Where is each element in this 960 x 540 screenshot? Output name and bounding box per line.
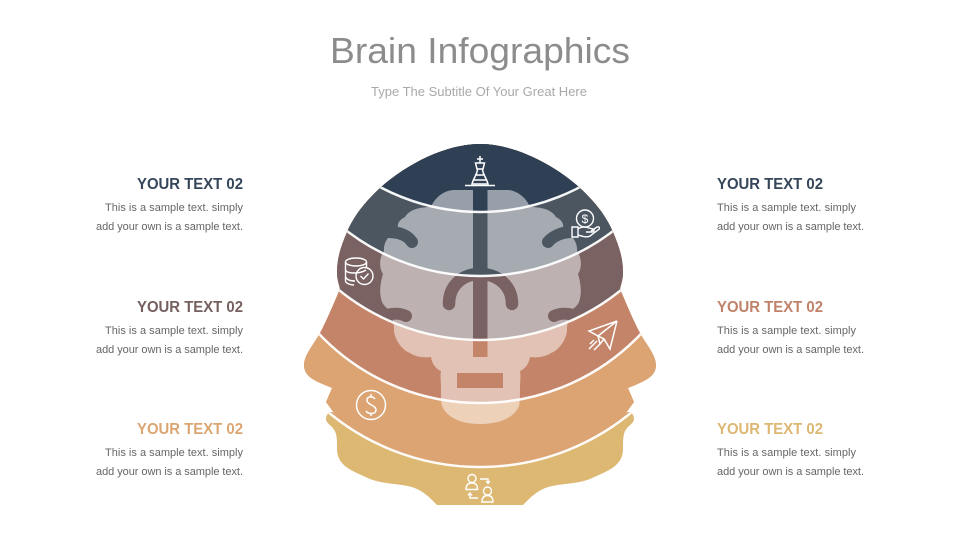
text block: right 1: YOUR TEXT 02 xyxy=(717,176,823,193)
icon: chess king xyxy=(465,156,495,186)
text block: left 1 xyxy=(96,176,244,233)
head silhouette with colour bands xyxy=(304,144,656,505)
icon: hand holding coin: $ xyxy=(582,212,589,226)
text block: left 1: YOUR TEXT 02 xyxy=(137,176,243,193)
icon: hand holding coin xyxy=(572,210,599,237)
text block: right 3: This is a sample text. simply xyxy=(717,447,856,459)
text block: right 2: add your own is a sample text. xyxy=(717,344,864,356)
text block: left 2: This is a sample text. simply xyxy=(105,325,244,337)
subtitle: Type The Subtitle Of Your Great Here xyxy=(371,84,587,99)
text block: right 2: YOUR TEXT 02 xyxy=(717,299,823,316)
text block: left 3 xyxy=(96,421,244,478)
text block: left 2: YOUR TEXT 02 xyxy=(137,299,243,316)
brain overlay xyxy=(380,190,581,424)
icon: dollar coin xyxy=(356,390,386,420)
text block: right 1 xyxy=(717,176,864,233)
text block: left 1: This is a sample text. simply xyxy=(105,202,244,214)
text block: left 1: add your own is a sample text. xyxy=(96,221,243,233)
text block: left 3: This is a sample text. simply xyxy=(105,447,244,459)
band divider arcs xyxy=(318,186,642,468)
text block: right 1: This is a sample text. simply xyxy=(717,202,856,214)
text block: right 2: This is a sample text. simply xyxy=(717,325,856,337)
title: Brain Infographics xyxy=(330,30,630,71)
icon: database with check xyxy=(346,258,373,285)
text block: right 3: YOUR TEXT 02 xyxy=(717,421,823,438)
icon: paper plane xyxy=(589,321,617,350)
text block: right 3 xyxy=(717,421,864,478)
text block: left 2 xyxy=(96,299,244,356)
text block: right 3: add your own is a sample text. xyxy=(717,466,864,478)
text block: left 3: add your own is a sample text. xyxy=(96,466,243,478)
text block: left 3: YOUR TEXT 02 xyxy=(137,421,243,438)
text block: left 2: add your own is a sample text. xyxy=(96,344,243,356)
icon: people exchange xyxy=(466,474,493,502)
text block: right 2 xyxy=(717,299,864,356)
text block: right 1: add your own is a sample text. xyxy=(717,221,864,233)
